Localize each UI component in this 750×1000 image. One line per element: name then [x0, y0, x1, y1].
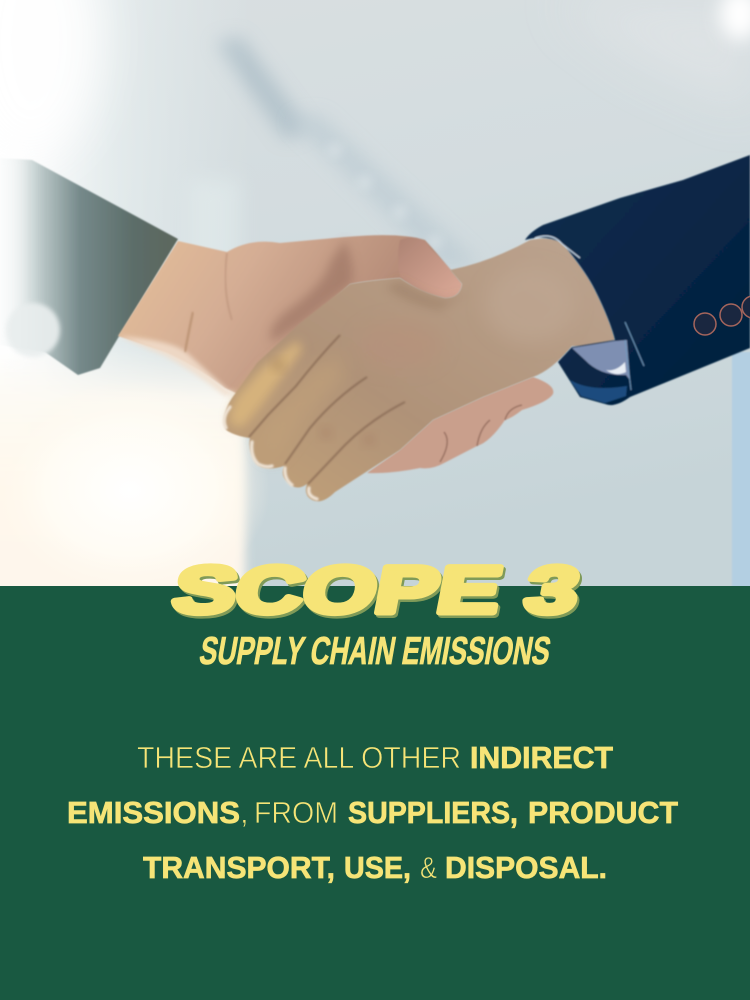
photo: white light flare from the left	[0, 0, 270, 610]
text block: scope 3 description: INDIRECT	[470, 740, 613, 775]
text block: scope 3 description: DISPOSAL.	[445, 850, 607, 885]
photo: left jacket sleeve	[0, 145, 178, 375]
icon: jacket cuff buttons	[694, 296, 750, 335]
text block: scope 3 description: SUPPLIERS,	[348, 795, 518, 830]
photo: lower fingers of left hand	[367, 377, 553, 473]
text block: scope 3 description: &	[420, 850, 437, 885]
photo: left hand	[118, 235, 462, 396]
title: Scope 3: SCOPE 3	[167, 554, 585, 627]
title: Scope 3	[167, 554, 587, 630]
text block: scope 3 description: USE,	[344, 850, 411, 885]
panel: green text background	[0, 586, 750, 1000]
text block: scope 3 description: ,	[240, 795, 249, 830]
photo: blurred office background	[0, 0, 750, 592]
text block: scope 3 description	[67, 740, 678, 885]
text block: scope 3 description: TRANSPORT,	[143, 850, 335, 885]
title: Scope 3: SCOPE 3	[169, 557, 587, 630]
text block: scope 3 description: FROM	[254, 795, 338, 830]
photo: right hand	[224, 239, 615, 501]
photo: right navy jacket sleeve	[525, 155, 750, 405]
text block: scope 3 description: PRODUCT	[528, 795, 678, 830]
subtitle: Supply Chain Emissions: SUPPLY CHAIN EMISSIONS	[196, 629, 554, 673]
text block: scope 3 description: THESE ARE ALL OTHER	[137, 740, 461, 775]
text block: scope 3 description: EMISSIONS	[67, 795, 240, 830]
